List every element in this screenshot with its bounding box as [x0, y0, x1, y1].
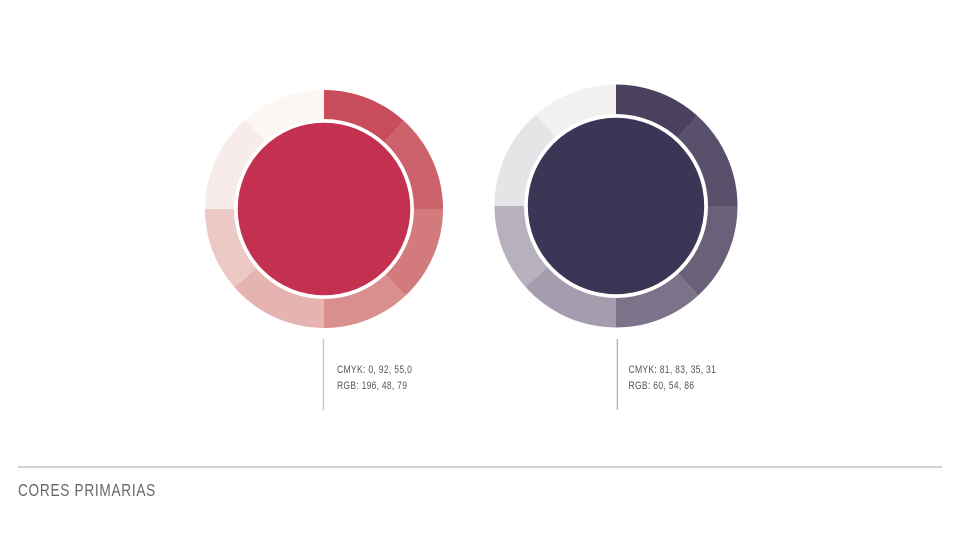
callout: purple colour values: CMYK: 81, 83, 35, 31 — [628, 364, 716, 376]
callout: red colour values: CMYK: 0, 92, 55,0 — [337, 364, 412, 376]
callout: purple colour values: RGB: 60, 54, 86 — [628, 380, 694, 392]
callout: red colour values: RGB: 196, 48, 79 — [337, 380, 407, 392]
callout: red colour values — [323, 339, 412, 410]
callout: purple colour values — [617, 339, 716, 410]
panel: purple primary colour wheel — [494, 84, 738, 328]
panel: red primary colour wheel — [205, 90, 443, 328]
heading: section title: CORES PRIMARIAS — [18, 482, 155, 500]
